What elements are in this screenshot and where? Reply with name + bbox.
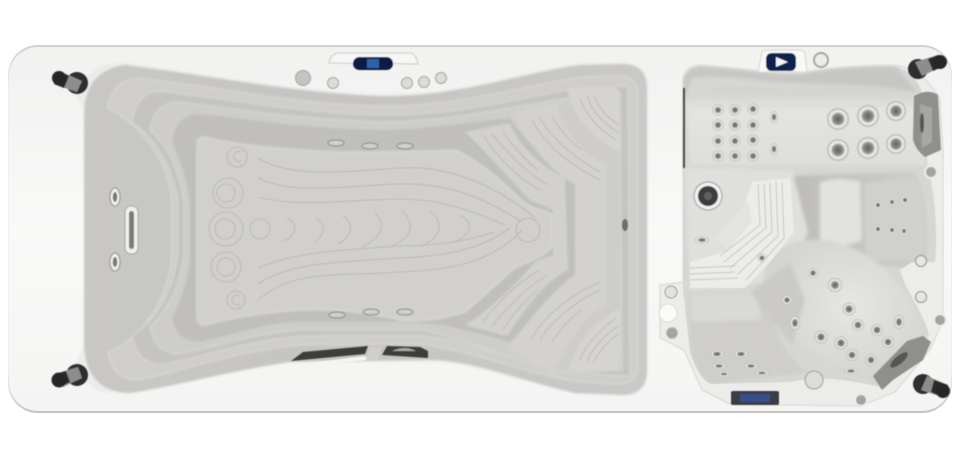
stairs with ribs: [690, 178, 794, 288]
outer tread strip: [507, 103, 607, 374]
deck shell: [8, 45, 952, 413]
centre seat block: [820, 179, 862, 245]
top headrest: [913, 92, 941, 157]
tub basin: [84, 64, 647, 395]
bottom spa display: [731, 391, 779, 405]
hot tub deck fittings: [659, 53, 946, 406]
skimmer vents: [291, 346, 428, 367]
swim spa top view illustration: [8, 45, 952, 413]
post: top right: [908, 55, 947, 79]
tread groove lines: [483, 96, 618, 362]
hot tub basin shapes: [684, 67, 928, 385]
control panel bump: [329, 53, 418, 64]
seat highlight: [692, 297, 760, 320]
step contour four: [172, 114, 580, 342]
step contour two: [132, 86, 630, 376]
hot tub rim: [660, 65, 943, 406]
step contour one: [108, 76, 638, 384]
top spa display: [758, 50, 807, 72]
post: bottom right: [913, 374, 950, 398]
back bench: [688, 105, 922, 161]
corner tread top: [567, 87, 620, 152]
coping lip: [70, 62, 648, 396]
tub lip and fittings deck: [660, 65, 943, 406]
right seat: [866, 184, 880, 259]
swim jets: [328, 140, 413, 318]
lounger: [765, 239, 888, 337]
corner tread bottom: [568, 308, 620, 371]
upper wall band: [684, 66, 915, 92]
inner tread strip: [465, 123, 568, 336]
seat jets: [695, 196, 909, 376]
side wall chrome jets: [110, 188, 628, 271]
bottom headrest: [873, 336, 931, 390]
filter canister: [694, 182, 722, 210]
swim tub: [70, 62, 648, 396]
back wall massage jets: [712, 101, 906, 162]
corner ladder posts: [52, 55, 950, 398]
right wall well: [794, 174, 915, 267]
swim control display: [353, 57, 393, 70]
footwell shadow: [752, 264, 804, 341]
post: top left: [52, 71, 88, 94]
pool floor: [197, 137, 552, 325]
hot tub basin: [683, 66, 936, 388]
deck buttons: [296, 70, 446, 88]
floor wave lines and crescents: [209, 147, 540, 309]
post: bottom left: [52, 364, 88, 388]
step contour three: [150, 92, 622, 372]
swim tub details: [110, 53, 628, 367]
filter and step surround: [688, 170, 809, 282]
left seam: [683, 88, 685, 168]
lower left seat: [694, 322, 788, 368]
hot tub details: [659, 50, 946, 406]
